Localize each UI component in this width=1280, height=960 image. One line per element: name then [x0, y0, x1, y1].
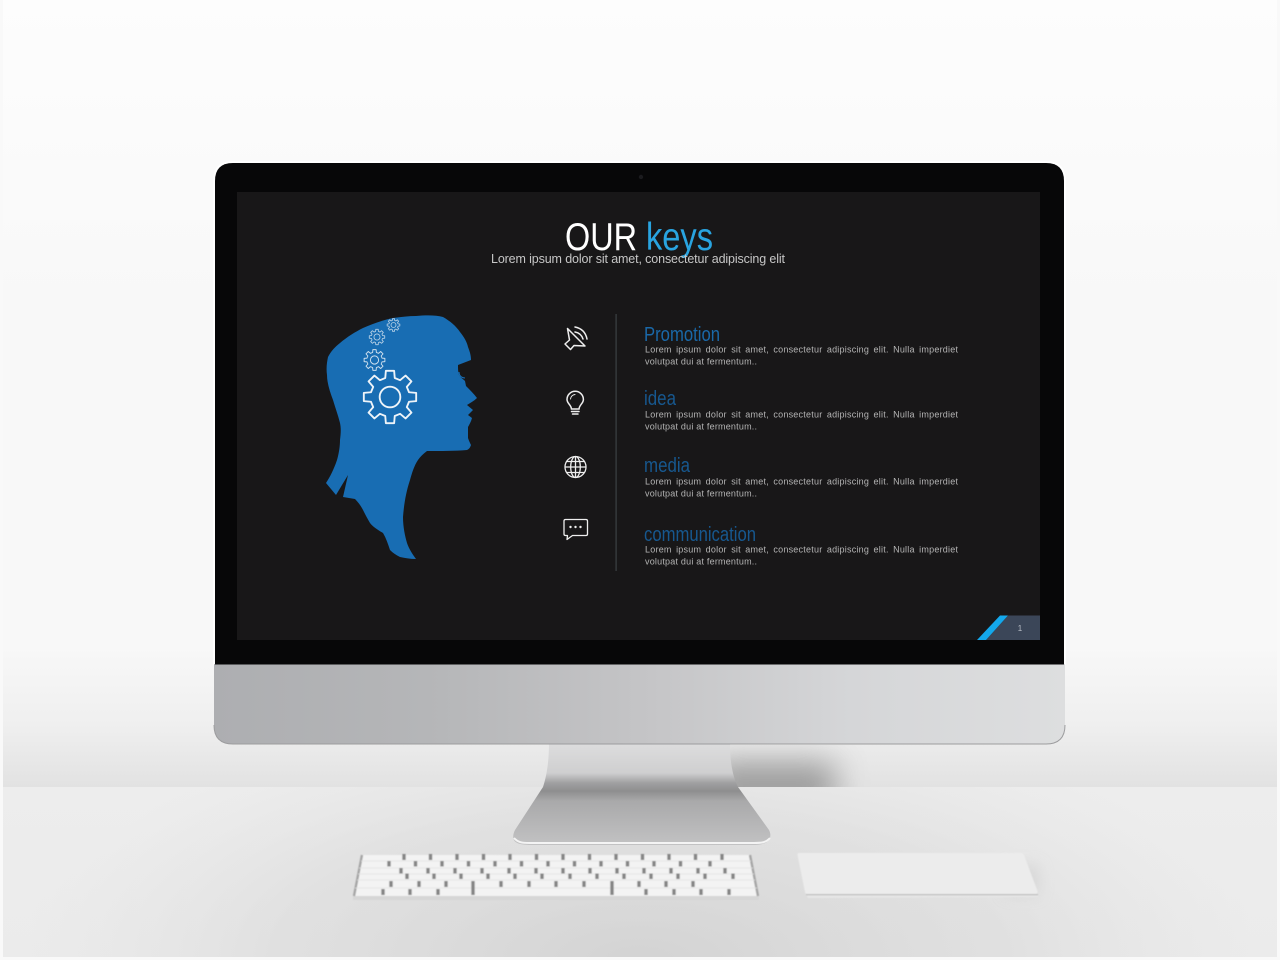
heading: media: media [644, 455, 691, 477]
body: Promotion: Lorem ipsum dolor sit amet, consectetur adipiscing elit. Nulla imperdiet [645, 344, 958, 354]
head silhouette with gears [326, 315, 477, 559]
key gaps [355, 861, 757, 888]
item: media [644, 455, 958, 498]
heading: communication: communication [644, 524, 756, 546]
icon: chat bubble [564, 520, 588, 540]
body: media: Lorem ipsum dolor sit amet, consectetur adipiscing elit. Nulla imperdiet [645, 476, 958, 486]
trackpad shadow [1005, 865, 1039, 895]
body: Promotion: volutpat dui at fermentum.. [645, 356, 757, 366]
title word keys: keys [646, 216, 713, 259]
monitor [213, 161, 1066, 744]
item: idea [644, 388, 958, 432]
keyboard front edge [353, 896, 759, 900]
subtitle: Lorem ipsum dolor sit amet, consectetur adipiscing elit [491, 252, 786, 266]
title [565, 216, 713, 259]
chin lower edge [214, 725, 1065, 744]
slide screen [237, 192, 1040, 640]
tiny gear [387, 319, 400, 331]
body: communication: volutpat dui at fermentum.. [645, 556, 757, 566]
blue accent stripe [977, 616, 1008, 640]
title word OUR: OUR [565, 216, 637, 259]
monitor outer edge glow [213, 161, 1066, 665]
item: Promotion [644, 324, 958, 366]
icon: megaphone [565, 327, 587, 350]
camera [639, 175, 643, 179]
monitor stand [513, 743, 770, 845]
page number: 1 [1018, 624, 1023, 633]
body: communication: Lorem ipsum dolor sit amet, consectetur adipiscing elit. Nulla imperdiet [645, 544, 958, 554]
keyboard side edges [354, 855, 758, 896]
body: media: volutpat dui at fermentum.. [645, 488, 757, 498]
page number tab [977, 616, 1040, 640]
head silhouette [326, 315, 477, 559]
trackpad top [798, 853, 1038, 894]
desk surface [0, 787, 1280, 960]
body: idea: Lorem ipsum dolor sit amet, consectetur adipiscing elit. Nulla imperdiet [645, 410, 958, 420]
monitor bezel [215, 163, 1064, 664]
icon: globe [565, 456, 586, 478]
eyelash [459, 372, 465, 378]
stand base highlight [514, 838, 770, 843]
body: idea: volutpat dui at fermentum.. [645, 422, 757, 432]
item: communication [644, 524, 958, 566]
desk shading [0, 787, 1280, 957]
trackpad front edge [806, 894, 1038, 898]
trackpad edge line [806, 894, 1038, 895]
heading: idea: idea [644, 388, 677, 410]
medium gear [364, 350, 385, 370]
large gear [364, 371, 416, 423]
vertical divider [616, 314, 617, 571]
monitor chin [214, 664, 1065, 744]
key marks [383, 854, 733, 895]
small gear [369, 329, 385, 345]
keyboard body [353, 855, 759, 900]
icon: light bulb [567, 391, 583, 414]
heading: Promotion: Promotion [644, 324, 720, 346]
keyboard [353, 854, 759, 900]
monitor shadow on wall [730, 745, 852, 787]
trackpad [798, 853, 1038, 898]
